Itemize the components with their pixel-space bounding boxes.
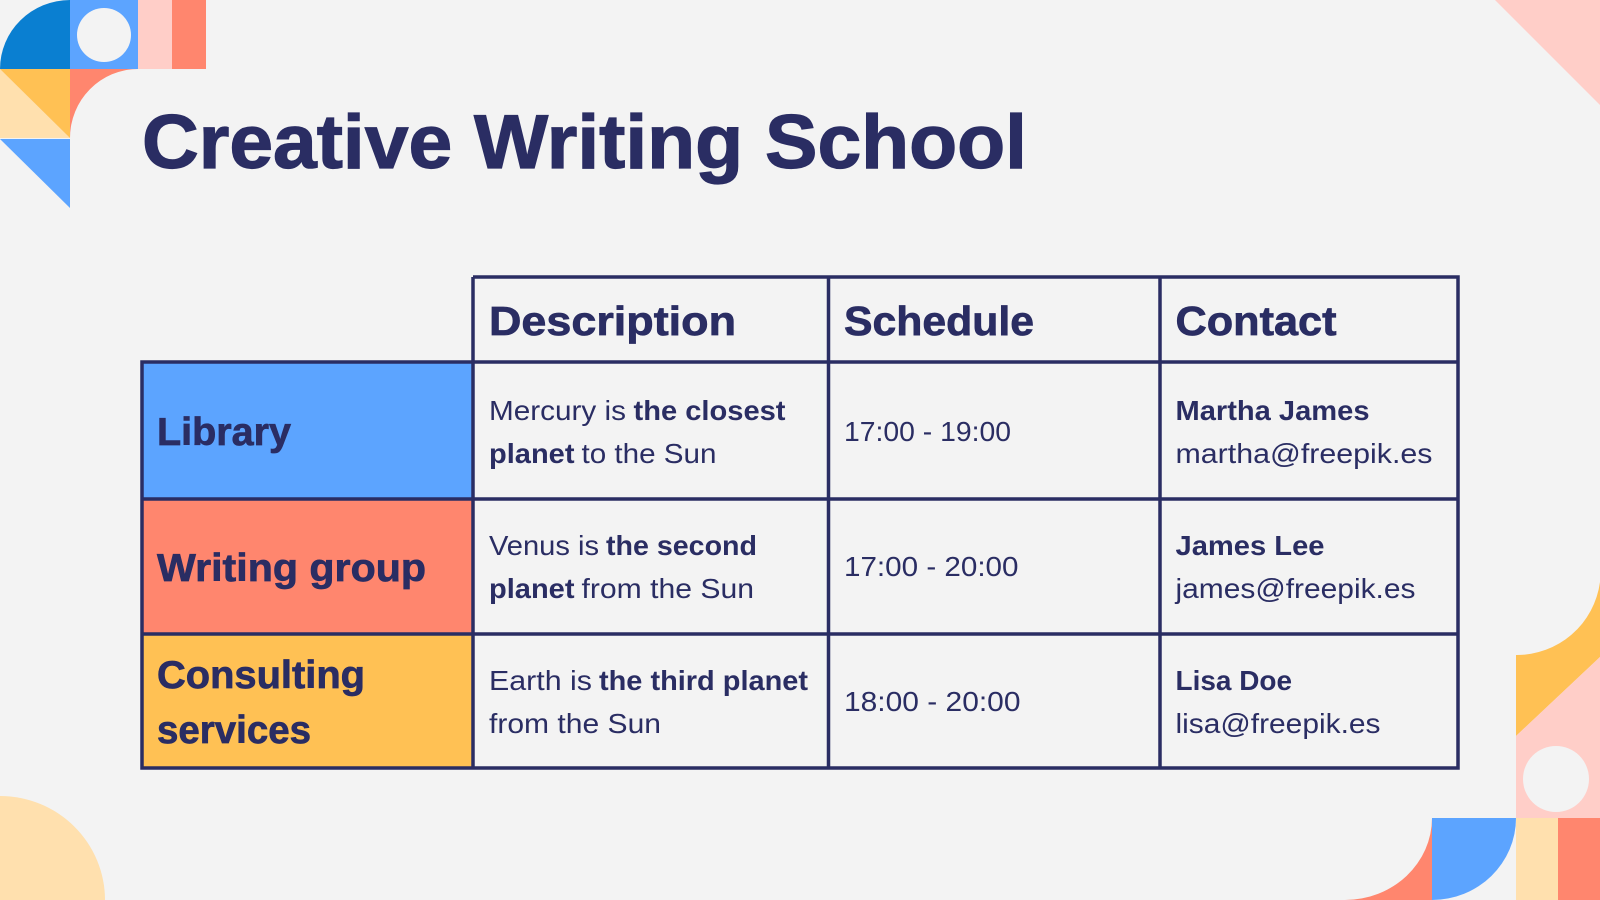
schedule: Library: 17:00 - 19:00	[844, 416, 1011, 447]
contact: James Lee	[1174, 530, 1416, 604]
row label cell: Consulting services	[142, 634, 473, 768]
description: Venus: from the Sun	[582, 573, 754, 604]
column header: Contact: Contact	[1176, 298, 1337, 344]
column header: Description: Description	[489, 298, 736, 344]
description: Earth: from the Sun	[489, 708, 661, 739]
row label: Consulting services	[157, 654, 365, 752]
contact: Martha James: Martha James	[1176, 395, 1370, 426]
description: Venus: Venus is	[489, 530, 599, 561]
decoration: bottom-right geometric cluster	[1345, 582, 1600, 900]
description: Mercury: to the Sun	[582, 438, 716, 469]
decoration: top-left geometric cluster	[0, 0, 206, 208]
schedule: Consulting services: 18:00 - 20:00	[844, 686, 1020, 717]
description: Venus: planet	[489, 573, 574, 604]
contact: Lisa Doe: Lisa Doe	[1176, 665, 1292, 696]
description: Mercury: Mercury is	[489, 395, 626, 426]
row label: Consulting services: services	[157, 709, 311, 752]
decoration: top-right pink triangle	[1495, 0, 1600, 105]
description: Mercury	[489, 395, 786, 469]
table	[142, 277, 1458, 768]
contact: Martha James: martha@freepik.es	[1176, 438, 1432, 469]
title: Creative Writing School	[142, 100, 1027, 185]
contact: Martha James	[1176, 395, 1432, 469]
description: Venus: the second	[606, 530, 757, 561]
description: Earth: the third planet	[599, 665, 808, 696]
row label: Library: Library	[157, 411, 291, 454]
contact: James Lee: James Lee	[1176, 530, 1324, 561]
contact: Lisa Doe	[1176, 665, 1380, 739]
contact: Lisa Doe: lisa@freepik.es	[1176, 708, 1380, 739]
column header: Schedule: Schedule	[844, 298, 1034, 344]
row label: Writing group: Writing group	[157, 547, 426, 590]
row label cell: Writing group	[142, 499, 473, 634]
description: Venus	[489, 530, 757, 604]
decoration: bottom-left pale quarter circle	[0, 796, 105, 900]
description: Mercury: the closest	[634, 395, 786, 426]
schedule: Writing group: 17:00 - 20:00	[844, 551, 1018, 582]
description: Earth: Earth is	[489, 665, 592, 696]
row label cell: Library	[142, 362, 473, 499]
row label: Consulting services: Consulting	[157, 654, 365, 697]
description: Earth	[489, 665, 808, 739]
contact: James Lee: james@freepik.es	[1174, 573, 1416, 604]
table grid	[142, 277, 1458, 768]
description: Mercury: planet	[489, 438, 574, 469]
